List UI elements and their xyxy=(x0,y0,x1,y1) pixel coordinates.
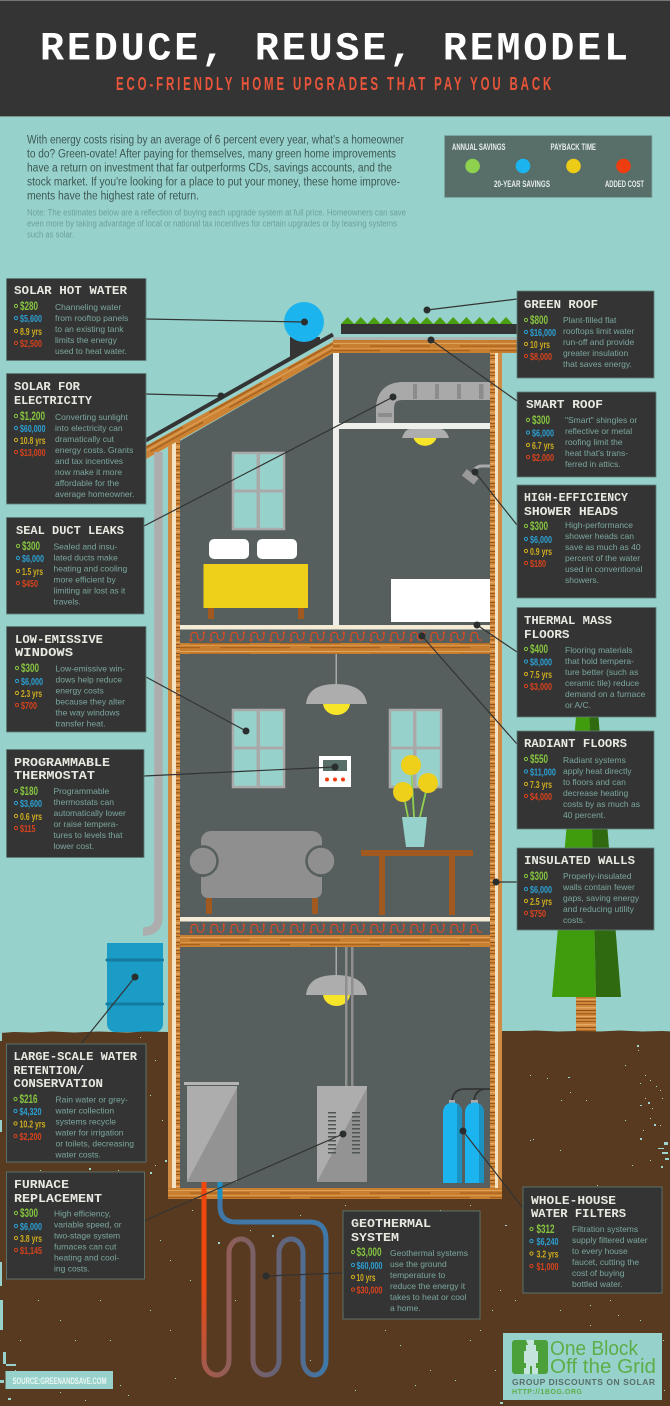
panel: seal duct leaks: travels. xyxy=(54,596,81,606)
panel: low-emissive windows: WINDOWS xyxy=(15,647,73,660)
panel: programmable thermostat: Programmable xyxy=(54,786,110,796)
panel: seal duct leaks: Sealed and insu- xyxy=(54,542,117,552)
panel: radiant floors: decrease heating xyxy=(563,788,628,798)
panel: geothermal system: reduce the energy it xyxy=(390,1281,466,1291)
panel: solar for electricity: Converting sunlight xyxy=(55,412,128,422)
panel: whole-house water filters: $312 xyxy=(536,1222,555,1236)
leader lines xyxy=(81,299,523,1280)
panel: programmable thermostat: thermostats can xyxy=(54,797,114,807)
panel: geothermal system: Geothermal systems xyxy=(390,1248,468,1258)
panel: solar for electricity: energy costs. Grants xyxy=(55,445,133,455)
attic lamp xyxy=(402,429,449,446)
panel: insulated walls xyxy=(517,848,654,930)
panel: furnace replacement: $1,145 xyxy=(20,1245,42,1257)
panel: solar hot water: limits the energy xyxy=(55,335,118,345)
panel: solar hot water: 8.9 yrs xyxy=(20,326,42,338)
panel: programmable thermostat: PROGRAMMABLE xyxy=(14,757,110,770)
floor: radiant upper xyxy=(180,625,490,654)
panel: programmable thermostat: THERMOSTAT xyxy=(14,770,95,783)
green roof xyxy=(341,317,517,334)
panel: whole-house water filters: supply filtered water xyxy=(572,1235,648,1245)
panel: green roof: run-off and provide xyxy=(563,337,634,347)
panel: radiant floors: Radiant systems xyxy=(563,755,626,765)
panel: smart roof: roofing limit the xyxy=(565,437,623,447)
panel: high-efficiency shower heads: percent of the water xyxy=(565,553,640,563)
panel: seal duct leaks: $300 xyxy=(22,539,40,553)
legend: 20-YEAR SAVINGS xyxy=(494,179,550,189)
panel: solar for electricity xyxy=(6,374,146,504)
panel: thermal mass floors: or A/C. xyxy=(565,700,591,710)
intro paragraph: have a return on investment that far outperforms CDs, savings accounts, and the xyxy=(27,162,392,174)
panel: thermal mass floors: $3,000 xyxy=(530,681,552,693)
panel: smart roof: "Smart" shingles or xyxy=(565,415,637,425)
panel: solar for electricity: SOLAR FOR xyxy=(14,381,80,394)
panel: high-efficiency shower heads: showers. xyxy=(565,575,599,585)
panel: radiant floors: $550 xyxy=(530,752,548,766)
panel: geothermal system: $3,000 xyxy=(356,1245,382,1259)
upper window xyxy=(233,453,284,529)
panel: solar hot water: $2,500 xyxy=(20,338,42,350)
water filter tanks xyxy=(443,1089,490,1183)
panel: whole-house water filters: $1,000 xyxy=(536,1261,559,1273)
panel: green roof: 10 yrs xyxy=(530,339,550,351)
panel: large-scale water retention: Rain water or grey- xyxy=(56,1095,128,1105)
panel: programmable thermostat: $115 xyxy=(20,823,36,835)
panel: geothermal system: 10 yrs xyxy=(356,1272,376,1284)
panel: solar hot water: $5,600 xyxy=(20,313,42,325)
panel: furnace replacement: $6,000 xyxy=(20,1221,42,1233)
side table xyxy=(361,850,473,915)
panel: seal duct leaks: SEAL DUCT LEAKS xyxy=(16,525,124,538)
panel: high-efficiency shower heads: shower heads can xyxy=(565,531,634,541)
title: REDUCE, REUSE, REMODEL xyxy=(40,28,628,72)
panel: thermal mass floors: Flooring materials xyxy=(565,645,633,655)
panel: green roof: GREEN ROOF xyxy=(524,299,598,312)
panel: smart roof: heat that's trans- xyxy=(565,448,628,458)
panel: programmable thermostat xyxy=(6,750,144,858)
panel: radiant floors: costs by as much as xyxy=(563,799,640,809)
panel: solar hot water: $280 xyxy=(20,299,38,313)
panel: geothermal system: $30,000 xyxy=(356,1284,383,1296)
intro paragraph: stock market. If you're looking for a place to put your money, these home improve- xyxy=(27,176,400,188)
panel: thermal mass floors: demand on a furnace xyxy=(565,689,646,699)
panel: programmable thermostat: 0.6 yrs xyxy=(20,811,42,823)
panel: seal duct leaks: lated ducts make xyxy=(54,552,118,562)
panel: whole-house water filters: $6,240 xyxy=(536,1236,559,1248)
panel: whole-house water filters xyxy=(523,1187,662,1293)
panel: high-efficiency shower heads: $300 xyxy=(530,519,548,533)
panel: programmable thermostat: $3,600 xyxy=(20,798,42,810)
panel: high-efficiency shower heads: $6,000 xyxy=(530,534,552,546)
panel: low-emissive windows: the way windows xyxy=(56,708,120,718)
panel: large-scale water retention: $4,320 xyxy=(20,1106,42,1118)
panel: large-scale water retention: systems recycle xyxy=(56,1117,116,1127)
panel: seal duct leaks xyxy=(6,518,144,614)
floor: radiant lower xyxy=(180,917,490,947)
panel: low-emissive windows: $300 xyxy=(21,661,39,675)
panel: solar for electricity: $1,200 xyxy=(20,409,45,423)
legend: ADDED COST xyxy=(605,179,644,189)
panel: geothermal system xyxy=(343,1211,480,1319)
source tag: SOURCE:GREENANDSAVE.COM xyxy=(12,1376,107,1387)
panel: large-scale water retention: LARGE-SCALE WATER xyxy=(14,1051,137,1064)
foundation xyxy=(168,1188,502,1199)
bathtub xyxy=(391,579,490,622)
panel: solar hot water: from rooftop panels xyxy=(55,313,128,323)
panel: large-scale water retention: $2,200 xyxy=(20,1131,42,1143)
panel: solar for electricity: now make it more xyxy=(55,467,122,477)
panel: low-emissive windows: because they alter xyxy=(56,697,125,707)
panel: large-scale water retention: $216 xyxy=(20,1092,38,1106)
panel: high-efficiency shower heads xyxy=(517,485,656,598)
panel: furnace replacement: 3.8 yrs xyxy=(20,1233,42,1245)
panel: whole-house water filters: bottled water. xyxy=(572,1279,623,1289)
panel: solar hot water: used to heat water. xyxy=(55,346,127,356)
panel: low-emissive windows: $6,000 xyxy=(21,676,43,688)
logo: One Block Off the Grid: HTTP://1BOG.ORG xyxy=(512,1389,583,1396)
rain barrel xyxy=(106,943,164,1032)
panel: insulated walls: costs. xyxy=(563,915,585,925)
panel: smart roof xyxy=(517,392,656,477)
flat roof xyxy=(333,337,517,353)
panel: solar for electricity: 10.8 yrs xyxy=(20,435,46,447)
panel: programmable thermostat: tures to levels that xyxy=(54,830,123,840)
geothermal pipes xyxy=(204,1182,326,1375)
panel: high-efficiency shower heads: save as much as 40 xyxy=(565,542,641,552)
note text: Note: The estimates below are a reflection of buying each upgrade system at full price. Homeowners can save xyxy=(27,208,406,218)
panel: thermal mass floors: $8,000 xyxy=(530,656,552,668)
living room lamp xyxy=(306,654,367,715)
sofa xyxy=(188,831,336,914)
panel: large-scale water retention: water costs. xyxy=(54,1150,101,1160)
panel: solar for electricity: affordable for the xyxy=(55,478,119,488)
panel: seal duct leaks: more efficient by xyxy=(54,574,116,584)
panel: radiant floors: 40 percent. xyxy=(563,810,606,820)
panel: solar hot water: SOLAR HOT WATER xyxy=(14,285,127,298)
panel: smart roof: $6,000 xyxy=(532,428,554,440)
panel: whole-house water filters: WHOLE-HOUSE xyxy=(531,1195,616,1208)
panel: solar for electricity: ELECTRICITY xyxy=(14,395,92,408)
panel: insulated walls: walls contain fewer xyxy=(562,882,635,892)
panel: high-efficiency shower heads: HIGH-EFFICIENCY xyxy=(524,492,628,505)
panel: radiant floors: to floors and can xyxy=(563,777,626,787)
panel: thermal mass floors: FLOORS xyxy=(524,629,570,642)
panel: smart roof: ferred in attics. xyxy=(565,459,621,469)
panel: thermal mass floors: THERMAL MASS xyxy=(524,615,612,628)
panel: high-efficiency shower heads: High-performance xyxy=(565,520,633,530)
panel: low-emissive windows: $700 xyxy=(21,700,37,712)
water heater tank xyxy=(184,1082,239,1182)
living room window left xyxy=(233,710,284,787)
panel: smart roof: $300 xyxy=(532,413,550,427)
panel: geothermal system: temperature to xyxy=(390,1270,446,1280)
living room window right xyxy=(390,710,441,787)
panel: programmable thermostat: $180 xyxy=(20,784,38,798)
panel: green roof: that saves energy. xyxy=(563,359,632,369)
panel: thermal mass floors xyxy=(517,608,656,717)
panel: solar for electricity: and tax incentives xyxy=(55,456,123,466)
panel: whole-house water filters: 3.2 yrs xyxy=(536,1248,559,1260)
panel: radiant floors: 7.3 yrs xyxy=(530,779,552,791)
flowers in vase xyxy=(393,755,438,847)
ground xyxy=(0,1030,670,1406)
panel: seal duct leaks: limiting air lost as it xyxy=(54,586,126,596)
panel: solar for electricity: $13,000 xyxy=(20,447,46,459)
panel: thermal mass floors: that hold tempera- xyxy=(565,656,634,666)
source tag xyxy=(6,1371,113,1389)
house xyxy=(143,334,517,1199)
panel: solar for electricity: $60,000 xyxy=(20,423,46,435)
panel: large-scale water retention: water for irrigation xyxy=(54,1128,124,1138)
interior xyxy=(180,353,490,1188)
panel: furnace replacement: High efficiency, xyxy=(54,1208,111,1218)
panel: high-efficiency shower heads: used in conventional xyxy=(565,564,643,574)
header band xyxy=(0,0,670,117)
panel: thermal mass floors: $400 xyxy=(530,642,548,656)
basement lamp xyxy=(306,947,367,1006)
logo: One Block Off the Grid: GROUP DISCOUNTS ON SOLAR xyxy=(512,1377,655,1387)
panel: insulated walls: $300 xyxy=(530,869,548,883)
panel: seal duct leaks: $6,000 xyxy=(22,553,44,565)
panel: green roof: Plant-filled flat xyxy=(563,315,617,325)
panel: insulated walls: INSULATED WALLS xyxy=(524,855,635,868)
panel: radiant floors xyxy=(517,731,654,829)
panel: insulated walls: gaps, saving energy xyxy=(563,893,640,903)
panel: whole-house water filters: cost of buying xyxy=(572,1268,625,1278)
panel: smart roof: 6.7 yrs xyxy=(532,440,554,452)
panel: high-efficiency shower heads: SHOWER HEADS xyxy=(524,506,618,519)
panel: insulated walls: 2.5 yrs xyxy=(530,896,552,908)
panel: high-efficiency shower heads: 0.9 yrs xyxy=(530,546,552,558)
panel: insulated walls: Properly-insulated xyxy=(563,871,632,881)
panel: smart roof: reflective or metal xyxy=(565,426,632,436)
note text: even more by taking advantage of local or national tax incentives for certain upgrades or by leasing systems xyxy=(27,218,398,228)
shower head xyxy=(462,466,490,485)
panel: furnace replacement: two-stage system xyxy=(54,1230,120,1240)
panel: seal duct leaks: $450 xyxy=(22,578,38,590)
solar panel xyxy=(143,334,333,442)
panel: programmable thermostat: or raise tempera- xyxy=(54,819,118,829)
legend: ANNUAL SAVINGS xyxy=(452,142,506,152)
panel: solar for electricity: average homeowner. xyxy=(55,489,134,499)
panel: furnace replacement: variable speed, or xyxy=(54,1220,122,1230)
panel: seal duct leaks: heating and cooling xyxy=(54,564,128,574)
panel: green roof: $8,000 xyxy=(530,351,552,363)
panel: programmable thermostat: automatically lower xyxy=(54,808,126,818)
panel: low-emissive windows: Low-emissive win- xyxy=(56,664,125,674)
panel: furnace replacement: FURNACE xyxy=(14,1179,69,1192)
panel: green roof: $800 xyxy=(530,313,548,327)
panel: whole-house water filters: Filtration systems xyxy=(572,1224,638,1234)
panel: whole-house water filters: WATER FILTERS xyxy=(531,1208,626,1221)
panel: smart roof: $2,000 xyxy=(532,452,554,464)
panel: solar hot water: to an existing tank xyxy=(55,324,124,334)
panel: geothermal system: $60,000 xyxy=(356,1260,383,1272)
panel: whole-house water filters: faucet, cutting the xyxy=(572,1257,639,1267)
panel: high-efficiency shower heads: $180 xyxy=(530,558,546,570)
panel: large-scale water retention: CONSERVATION xyxy=(14,1078,103,1091)
panel: geothermal system: use the ground xyxy=(390,1259,447,1269)
panel: solar for electricity: into electricity can xyxy=(55,423,123,433)
subtitle: ECO-FRIENDLY HOME UPGRADES THAT PAY YOU BACK xyxy=(116,74,551,95)
panel: furnace replacement: $300 xyxy=(20,1206,38,1220)
panel: solar hot water: Channeling water xyxy=(55,302,121,312)
panel: large-scale water retention: or toilets, decreasing xyxy=(56,1139,134,1149)
panel: insulated walls: $750 xyxy=(530,908,546,920)
solar hot water collector xyxy=(284,302,324,357)
panel: radiant floors: apply heat directly xyxy=(563,766,632,776)
panel: furnace replacement: heating and cool- xyxy=(54,1252,119,1262)
panel: low-emissive windows: dows help reduce xyxy=(56,675,122,685)
panel: low-emissive windows: energy costs xyxy=(56,686,104,696)
furnace xyxy=(317,947,367,1182)
panel: geothermal system: takes to heat or cool xyxy=(390,1292,467,1302)
note text xyxy=(27,208,406,240)
panel: green roof: rooftops limit water xyxy=(563,326,634,336)
panel: large-scale water retention: 10.2 yrs xyxy=(20,1118,46,1130)
panel: radiant floors: RADIANT FLOORS xyxy=(524,738,627,751)
tree xyxy=(552,612,621,1035)
panel: solar hot water xyxy=(6,278,146,360)
panel: green roof xyxy=(517,291,654,378)
logo: One Block Off the Grid: One Block xyxy=(550,1338,639,1360)
panel: low-emissive windows: transfer heat. xyxy=(56,719,106,729)
panel: programmable thermostat: lower cost. xyxy=(54,841,94,851)
panel: low-emissive windows: LOW-EMISSIVE xyxy=(15,634,103,647)
intro paragraph: ments have the highest rate of return. xyxy=(27,190,199,202)
panel: geothermal system: a home. xyxy=(390,1303,421,1313)
panel: furnace replacement: ing costs. xyxy=(54,1264,90,1274)
panel: radiant floors: $4,000 xyxy=(530,791,552,803)
panel: large-scale water retention: water collection xyxy=(54,1106,114,1116)
attic divider wall xyxy=(333,353,339,625)
panel: low-emissive windows xyxy=(6,626,146,732)
panel: radiant floors: $11,000 xyxy=(530,766,556,778)
intro paragraph xyxy=(27,134,404,202)
panel: thermal mass floors: ceramic tile) reduce xyxy=(565,678,639,688)
note text: such as solar. xyxy=(27,230,74,240)
panel: smart roof: SMART ROOF xyxy=(526,399,603,412)
panel: seal duct leaks: 1.5 yrs xyxy=(22,566,43,578)
legend xyxy=(444,136,652,198)
panel: furnace replacement: REPLACEMENT xyxy=(14,1193,102,1206)
panel: geothermal system: GEOTHERMAL xyxy=(351,1218,431,1231)
panel: large-scale water retention xyxy=(6,1044,146,1162)
panel: green roof: greater insulation xyxy=(563,348,628,358)
panel: large-scale water retention: RETENTION/ xyxy=(14,1065,84,1078)
walls xyxy=(168,353,502,1199)
panel: geothermal system: SYSTEM xyxy=(351,1232,399,1245)
bed xyxy=(204,539,308,619)
icon: robot block xyxy=(512,1340,548,1374)
panel: furnace replacement: furnaces can cut xyxy=(54,1242,117,1252)
panel: solar for electricity: dramatically cut xyxy=(55,434,115,444)
downspout xyxy=(143,452,158,932)
panel: green roof: $16,000 xyxy=(530,327,556,339)
panel: low-emissive windows: 2.3 yrs xyxy=(21,688,42,700)
panel: insulated walls: and reducing utility xyxy=(563,904,635,914)
panel: whole-house water filters: to every house xyxy=(572,1246,628,1256)
sloped roof xyxy=(143,342,333,461)
panel: furnace replacement xyxy=(6,1172,144,1279)
intro paragraph: With energy costs rising by an average of 6 percent every year, what's a homeowner xyxy=(27,134,404,146)
thermostat xyxy=(319,756,351,787)
intro paragraph: to do? Green-ovate! After paying for themselves, many green home improvements xyxy=(27,148,396,160)
legend: PAYBACK TIME xyxy=(550,142,596,152)
logo: One Block Off the Grid: Off the Grid xyxy=(550,1356,656,1378)
logo: One Block Off the Grid xyxy=(503,1333,662,1400)
panel: thermal mass floors: 7.5 yrs xyxy=(530,669,552,681)
duct xyxy=(378,384,490,423)
attic floor xyxy=(339,423,490,429)
panel: thermal mass floors: ture better (such as xyxy=(565,667,638,677)
panel: insulated walls: $6,000 xyxy=(530,884,552,896)
